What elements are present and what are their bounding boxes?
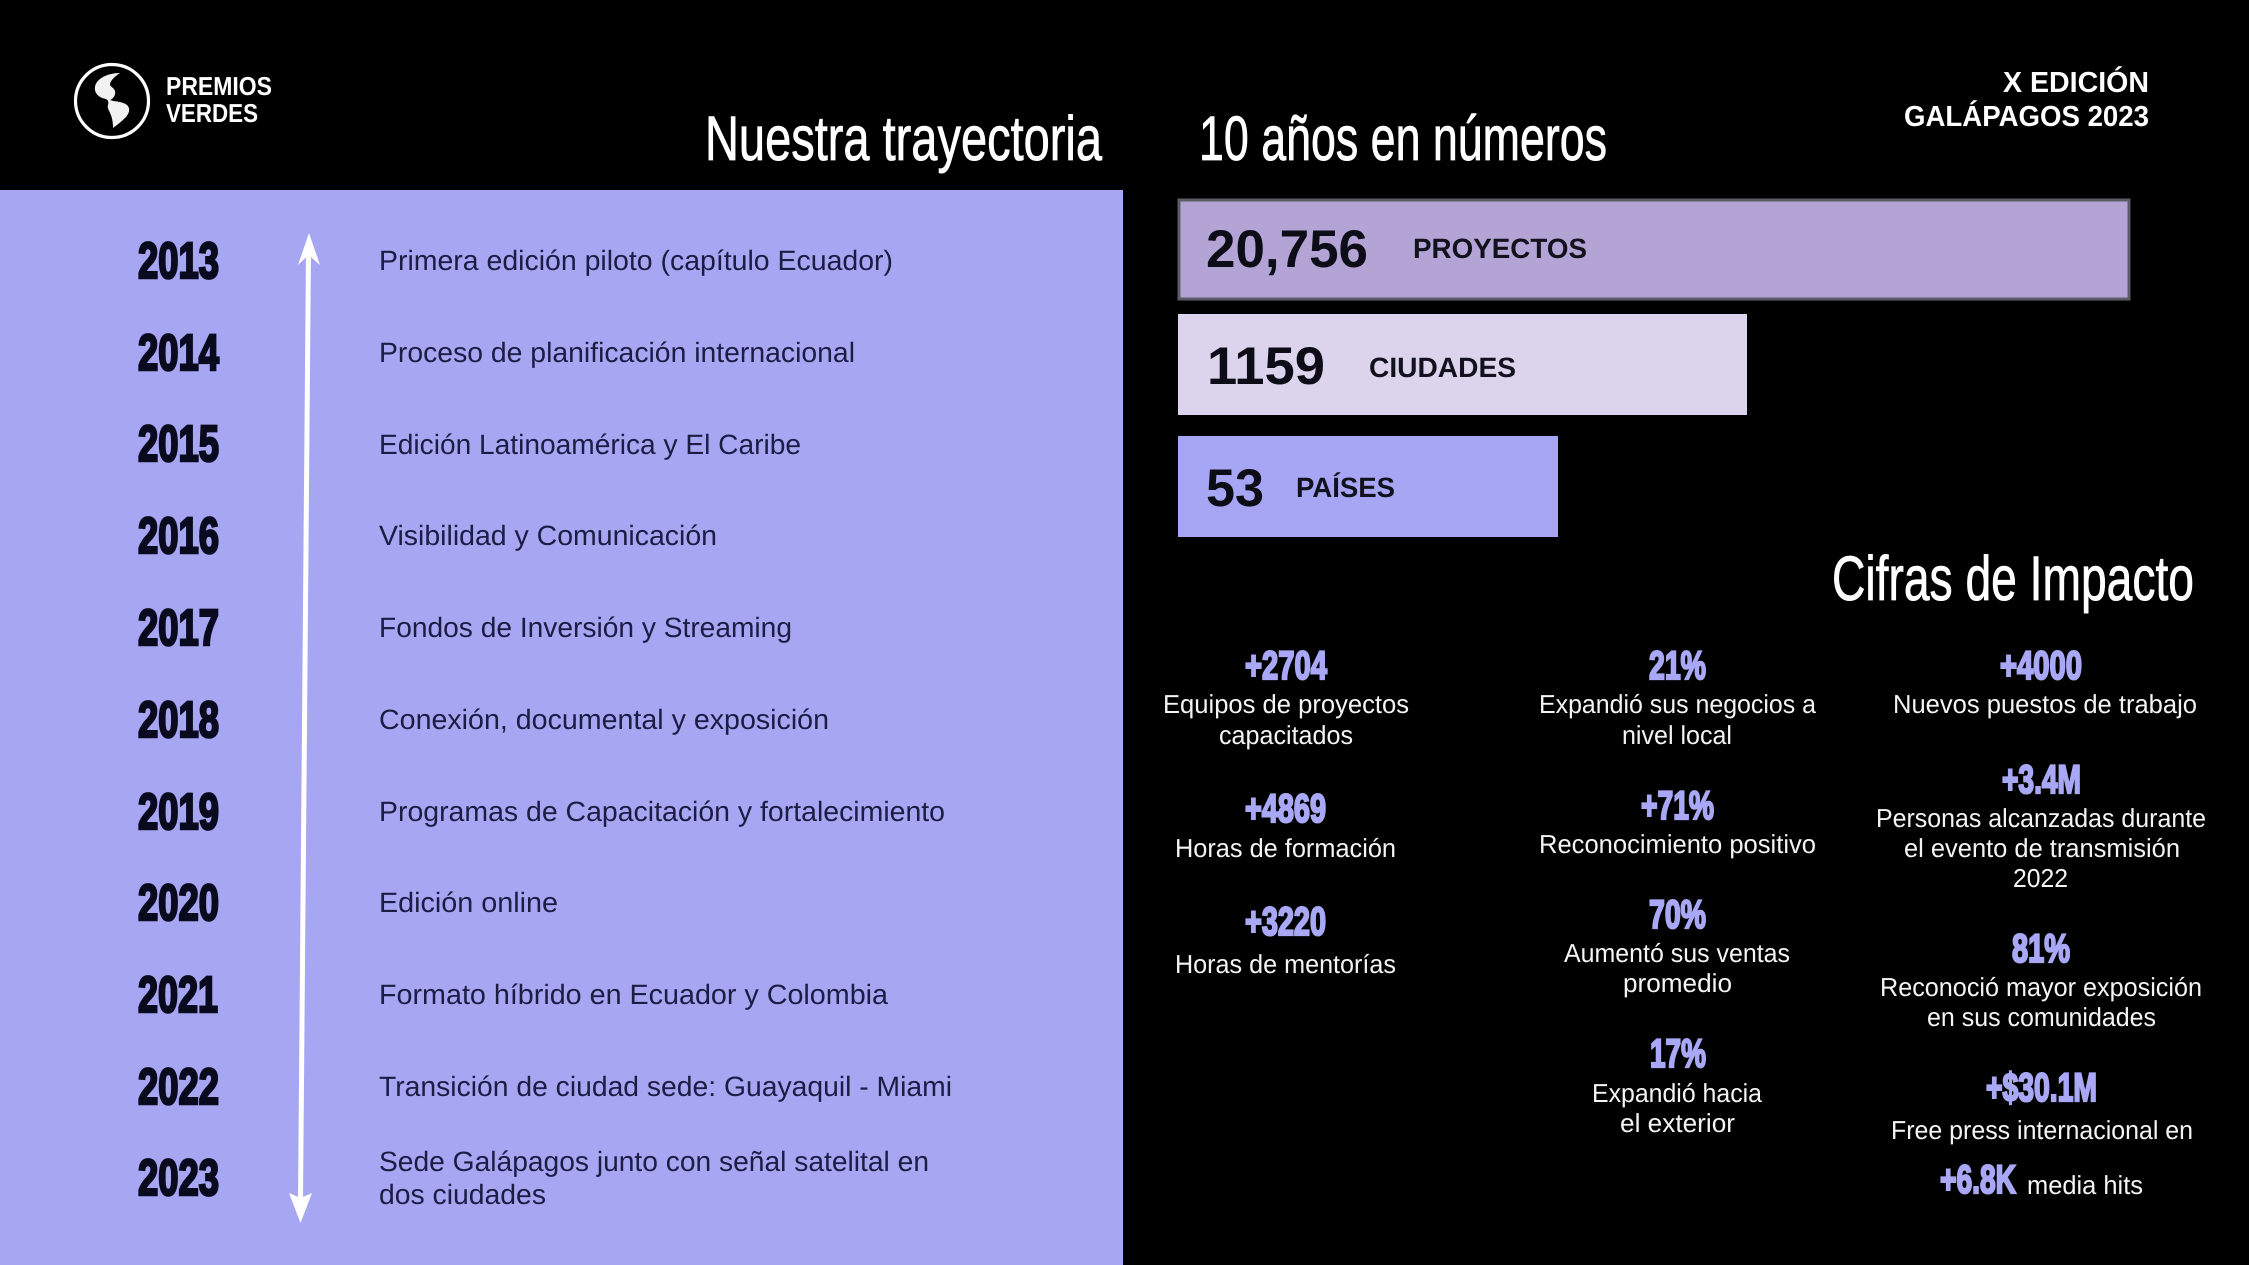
row 2017 [138,599,792,656]
stat: +71%: Reconocimiento positivo [1539,829,1816,859]
stat: +3.4M: el evento de transmisión [1904,833,2180,863]
stat: 70%: 70% [1649,893,1706,937]
stat: 17%: el exterior [1620,1108,1735,1138]
bar: ciudades: CIUDADES [1369,352,1516,383]
stat: 81%: 81% [2012,927,2070,971]
bar chart: 10 años en números [1178,200,2129,537]
row 2017: Fondos de Inversión y Streaming [379,612,792,643]
stat: 81%: Reconoció mayor exposición [1880,972,2202,1002]
row 2013 [138,232,893,289]
stat: +$30.1M and +6.8K: +6.8K [1940,1158,2016,1202]
stat: +3220: +3220 [1245,900,1326,944]
row 2014: Proceso de planificación internacional [379,337,855,368]
stat: 17%: 17% [1650,1032,1706,1076]
row 2018: 2018 [138,691,219,748]
stat: +71% [1539,784,1816,859]
row 2015: 2015 [138,415,219,472]
stat: +3.4M: +3.4M [2002,758,2081,802]
row 2014: 2014 [138,324,219,381]
stat: +3.4M: 2022 [2013,863,2068,893]
stat: +3220 [1175,900,1396,979]
row 2015 [138,415,801,472]
heading: 10 años en números: 10 años en números [1199,104,1607,174]
logo wordmark [166,71,272,128]
stat: +3.4M: Personas alcanzadas durante [1876,803,2206,833]
stat: +$30.1M and +6.8K: +$30.1M [1986,1066,2097,1110]
stat: +2704: +2704 [1245,644,1328,688]
stat: +4000: Nuevos puestos de trabajo [1893,689,2197,719]
edition label [1904,66,2149,133]
row 2023: 2023 [138,1149,219,1206]
row 2023: dos ciudades [379,1179,546,1210]
bar: países [1178,436,1558,537]
stat: +$30.1M and +6.8K [1891,1066,2193,1202]
bar: países: 53 [1206,459,1264,518]
bar: países: PAÍSES [1296,472,1395,503]
row 2020: Edición online [379,887,558,918]
row 2014 [138,324,855,381]
stat: 17%: Expandió hacia [1592,1078,1763,1108]
stat: +71%: +71% [1641,784,1714,828]
stat: 70%: promedio [1623,968,1732,998]
stat: 17% [1592,1032,1763,1138]
bar: ciudades [1178,314,1747,415]
row 2022: 2022 [138,1058,219,1115]
bar: ciudades: 1159 [1207,337,1325,396]
stat: 21% [1539,644,1817,750]
stat: 81%: en sus comunidades [1927,1002,2156,1032]
stat: +2704: Equipos de proyectos [1163,689,1409,719]
bar: proyectos: PROYECTOS [1413,233,1587,264]
row 2018: Conexión, documental y exposición [379,704,829,735]
logo wordmark: PREMIOS [166,71,272,101]
stat: +$30.1M and +6.8K: media hits [2027,1170,2143,1200]
stat: 21%: 21% [1649,644,1706,688]
arrow: timeline double-headed [289,233,320,1223]
stat: +4869: Horas de formación [1175,833,1396,863]
logo wordmark: VERDES [166,98,258,128]
panel: timeline [0,190,1123,1265]
row 2016: 2016 [138,507,219,564]
row 2018 [138,691,829,748]
edition label: X EDICIÓN [2003,66,2149,99]
bar: proyectos: 20,756 [1206,220,1368,279]
row 2022 [138,1058,952,1115]
row 2019 [138,783,945,840]
stat: +$30.1M and +6.8K: Free press internacional en [1891,1115,2193,1145]
row 2021 [138,966,888,1023]
row 2023: Sede Galápagos junto con señal satelital en [379,1146,929,1177]
heading: Nuestra trayectoria: Nuestra trayectoria [705,104,1103,174]
stat: +3.4M [1876,758,2206,893]
stat: +4000: +4000 [2000,644,2082,688]
row 2020: 2020 [138,874,219,931]
row 2021: Formato híbrido en Ecuador y Colombia [379,979,888,1010]
stat: +3220: Horas de mentorías [1175,949,1396,979]
row 2020 [138,874,558,931]
edition label: GALÁPAGOS 2023 [1904,100,2149,133]
stat: 21%: Expandió sus negocios a [1539,689,1817,719]
row 2013: Primera edición piloto (capítulo Ecuador) [379,245,893,276]
stat: 70% [1564,893,1790,998]
row 2016 [138,507,717,564]
logo: Premios Verdes [76,64,272,138]
stat: 21%: nivel local [1622,720,1732,750]
stat: 70%: Aumentó sus ventas [1564,938,1790,968]
stat: +4869 [1175,787,1396,863]
panel: impact figures [1163,644,2206,1202]
stat: +4000 [1893,644,2197,719]
row 2013: 2013 [138,232,219,289]
row 2017: 2017 [138,599,219,656]
stat: 81% [1880,927,2202,1032]
stat: +2704 [1163,644,1409,750]
row 2019: 2019 [138,783,219,840]
stat: +2704: capacitados [1219,720,1353,750]
row 2023 [138,1146,929,1210]
stat: +4869: +4869 [1245,787,1326,831]
row 2021: 2021 [138,966,218,1023]
row 2019: Programas de Capacitación y fortalecimiento [379,796,945,827]
bar: proyectos [1179,200,2129,299]
panel background [0,190,1123,1265]
icon: globe with Americas [76,64,148,138]
row 2022: Transición de ciudad sede: Guayaquil - Miami [379,1071,952,1102]
row 2016: Visibilidad y Comunicación [379,520,717,551]
row 2015: Edición Latinoamérica y El Caribe [379,429,801,460]
